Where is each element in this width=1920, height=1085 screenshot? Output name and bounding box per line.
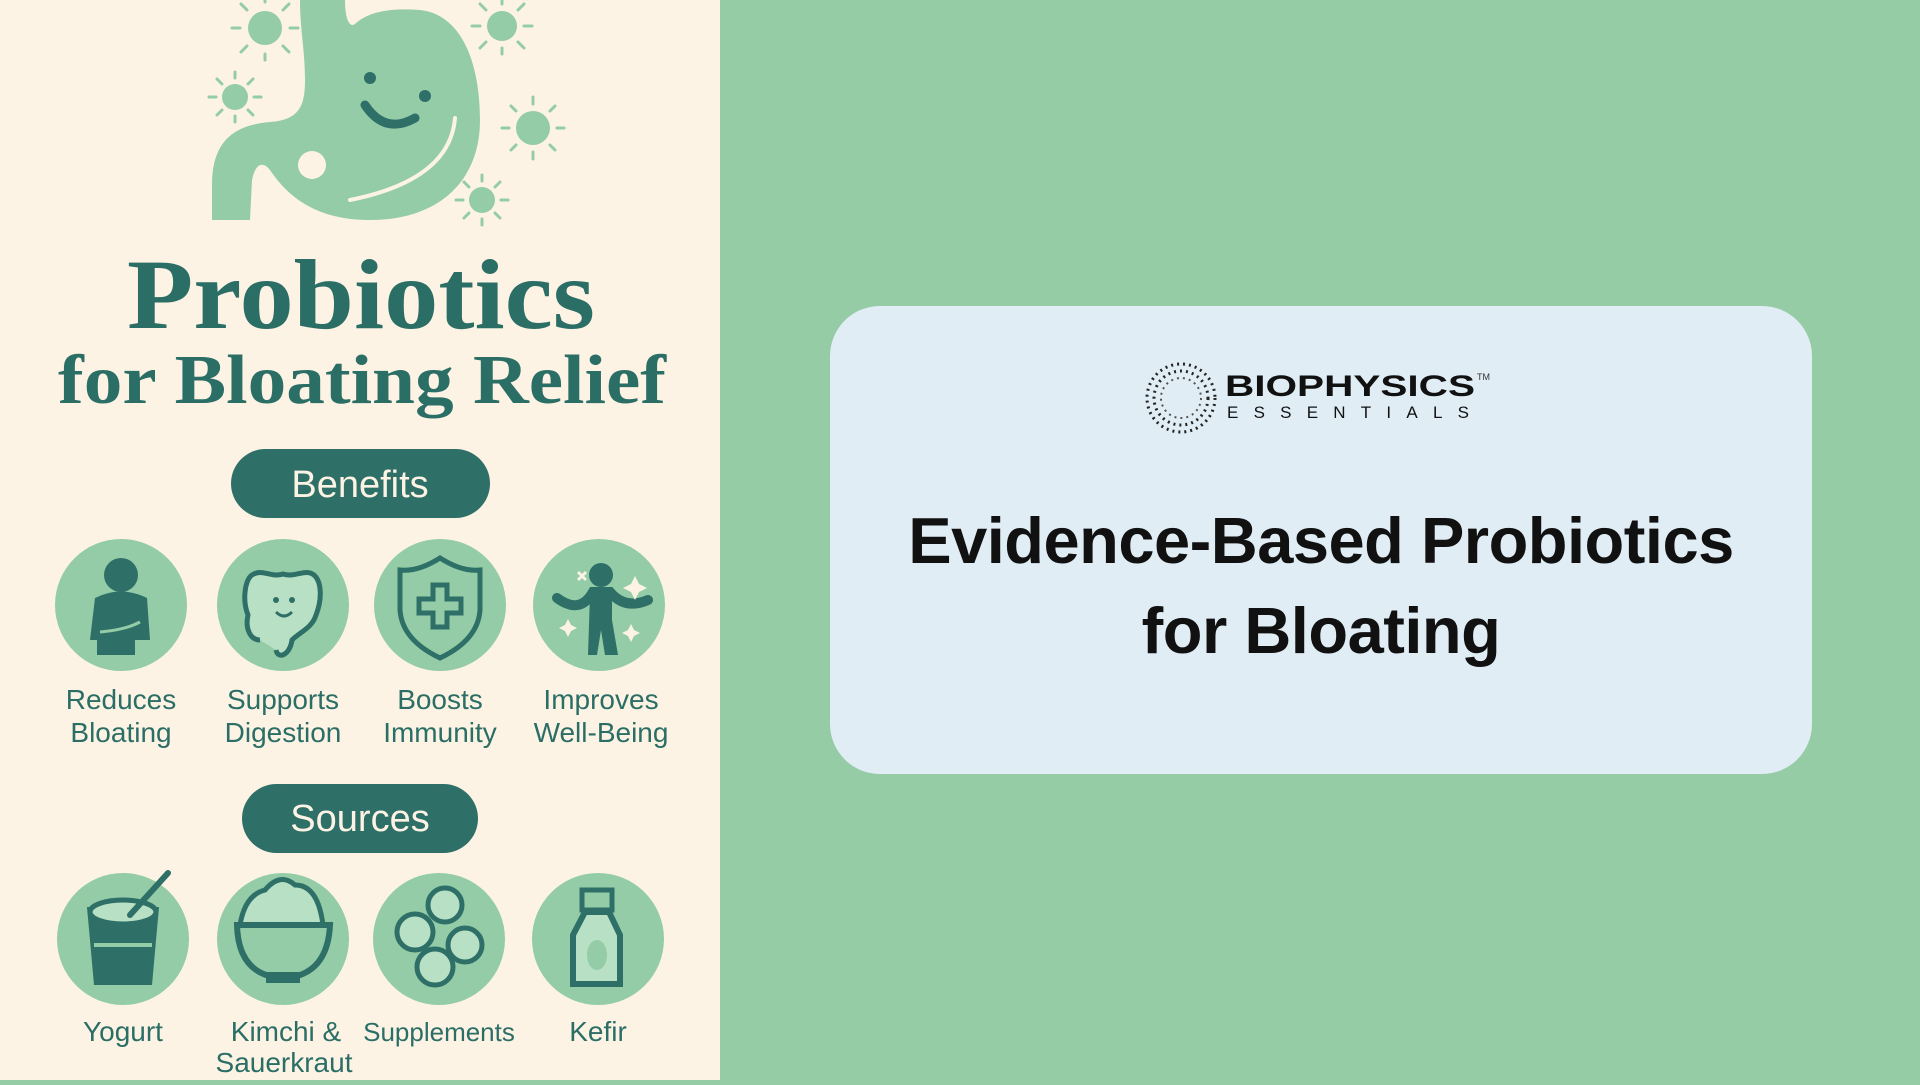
source: kimchi & sauerkraut: Sauerkraut — [216, 1047, 353, 1078]
logo: BioPhysics Essentials — [1146, 362, 1490, 434]
source: yogurt — [57, 873, 189, 1047]
title: Probiotics: Probiotics — [127, 239, 595, 350]
source: kimchi & sauerkraut — [216, 873, 353, 1078]
benefit: supports digestion — [217, 539, 349, 748]
source: supplements: Supplements — [363, 1017, 515, 1047]
source: supplements — [363, 873, 515, 1047]
benefit: boosts immunity — [374, 539, 506, 748]
heading pill: Benefits: Benefits — [291, 464, 429, 506]
icon: dotted circle figure — [1147, 364, 1215, 432]
benefit: improves well-being: Improves — [543, 684, 659, 715]
benefit: reduces bloating: Bloating — [70, 717, 172, 748]
heading pill: Sources: Sources — [290, 798, 430, 840]
source: yogurt: Yogurt — [83, 1016, 163, 1047]
source: kimchi & sauerkraut: Kimchi & — [231, 1016, 342, 1047]
heading: Evidence-Based Probiotics for Bloating: for Bloating — [1142, 594, 1500, 667]
benefit: improves well-being — [533, 539, 668, 748]
benefit: supports digestion: Digestion — [225, 717, 341, 748]
heading pill: Sources — [242, 784, 478, 853]
benefit: boosts immunity: Boosts — [397, 684, 483, 715]
heading: Evidence-Based Probiotics for Bloating — [908, 504, 1734, 667]
benefit: boosts immunity: Immunity — [383, 717, 497, 748]
source: kefir — [532, 873, 664, 1047]
heading: Evidence-Based Probiotics for Bloating: Evidence-Based Probiotics — [908, 504, 1734, 577]
logo: BioPhysics Essentials: ESSENTIALS — [1227, 403, 1477, 422]
logo: BioPhysics Essentials: BIOPHYSICS — [1225, 370, 1475, 403]
subtitle: for Bloating Relief: for Bloating Relief — [58, 342, 667, 419]
benefit: improves well-being: Well-Being — [534, 717, 668, 748]
source: kefir: Kefir — [569, 1016, 627, 1047]
benefit: reduces bloating — [55, 539, 187, 748]
benefit: reduces bloating: Reduces — [66, 684, 176, 715]
heading pill: Benefits — [231, 449, 490, 518]
benefit: supports digestion: Supports — [227, 684, 339, 715]
panel: title card — [830, 306, 1812, 774]
panel: left infographic — [0, 0, 720, 1080]
icon: happy stomach with microbes — [209, 0, 564, 225]
logo: BioPhysics Essentials: TM — [1477, 372, 1490, 382]
